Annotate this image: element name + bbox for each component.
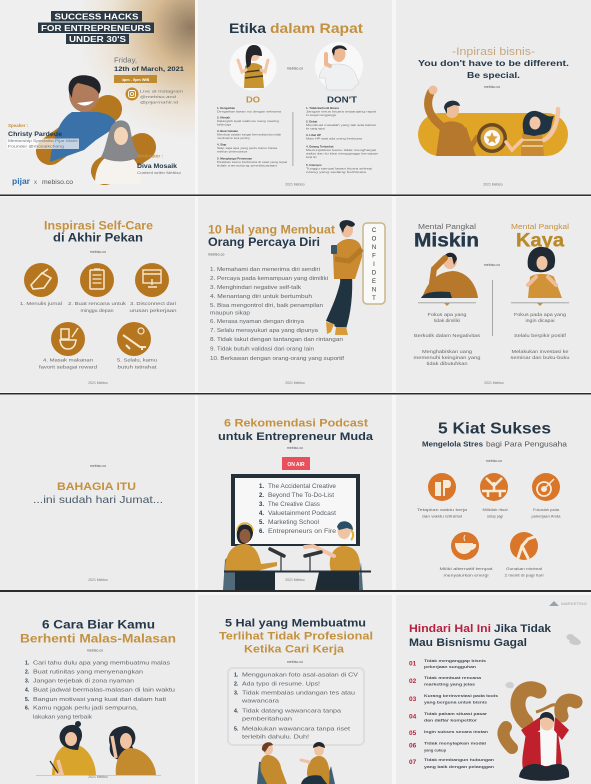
panel: success hacks webinar poster bbox=[0, 0, 195, 194]
list: ten points: 5. Bisa mengontrol diri, baik penampilan bbox=[210, 303, 323, 309]
labels: Milikilah ritual bbox=[482, 507, 508, 512]
heading: -Inpirasi bisnis- bbox=[452, 46, 535, 58]
moderator photo bbox=[95, 120, 142, 184]
list text bbox=[424, 659, 498, 769]
list: six tips: 2. bbox=[25, 670, 30, 676]
brand: mebiso: mebiso.co bbox=[208, 252, 224, 256]
list text: Tidak membuat rencana bbox=[424, 676, 482, 680]
screen with podcast list: The Creative Class bbox=[268, 502, 320, 508]
brand: mebiso: mebiso.co bbox=[287, 660, 303, 664]
labels: Fokuslah pada bbox=[533, 507, 560, 512]
card with list: terlebih dahulu. Duh! bbox=[242, 734, 309, 740]
list text: Tidak menyiapkan modal bbox=[424, 742, 486, 746]
icon: cooking bbox=[51, 322, 85, 356]
heading: kaya bbox=[511, 224, 570, 252]
decorative ghost: top right bbox=[566, 634, 581, 645]
panel: inspirasi self-care bbox=[0, 197, 195, 392]
icon: morning ritual bbox=[480, 473, 508, 501]
partner logos bbox=[12, 176, 73, 186]
logo: MARKETING bbox=[561, 602, 587, 606]
card with list: Ada typo di resume. Ups! bbox=[242, 682, 320, 688]
labels: pekerjaan Anda bbox=[532, 514, 561, 518]
footer: 2021 Mebiso bbox=[88, 578, 108, 582]
screen with podcast list bbox=[231, 474, 360, 546]
subtitle: Mengelola Stres bbox=[422, 442, 483, 448]
icon: instagram live: @mebiso.and bbox=[140, 95, 176, 99]
labels: setiap pagi bbox=[487, 514, 503, 518]
brand: mebiso: mebiso.co bbox=[484, 263, 500, 267]
title: 5 Kiat Sukses bbox=[438, 420, 551, 438]
numbers bbox=[409, 660, 417, 766]
icon: disconnect bbox=[135, 263, 169, 297]
screen with podcast list: 6. bbox=[259, 529, 264, 535]
icon: journal bbox=[24, 263, 58, 297]
brand: mebiso: mebiso.co bbox=[484, 85, 500, 89]
confident sign: I bbox=[373, 262, 375, 268]
speaker photo bbox=[50, 75, 116, 162]
list: six tips: Jangan terjebak di zona nyaman bbox=[33, 678, 134, 684]
card with list: 5. bbox=[234, 726, 239, 732]
title: 5 Hal yang Membuatmu bbox=[225, 618, 366, 630]
list: ten points: 3. Menghindari negative self-talk bbox=[210, 285, 302, 291]
title: success hacks: FOR ENTREPRENEURS bbox=[41, 24, 152, 33]
table line bbox=[36, 775, 161, 776]
quote: Be special. bbox=[467, 70, 520, 80]
speaker text bbox=[7, 123, 79, 149]
partner logos: x bbox=[34, 180, 37, 186]
list text: dan daftar kompetitor bbox=[424, 718, 478, 722]
list: dont: Tunggu sampai lawan bicara selesai bbox=[306, 166, 372, 170]
list: dont: 5. Interupsi bbox=[306, 163, 322, 167]
heading: dont: DON'T bbox=[327, 94, 358, 104]
list: six tips: 6. bbox=[25, 706, 30, 712]
numbers: 06 bbox=[409, 742, 417, 750]
rule lines bbox=[418, 302, 569, 306]
labels: 3. Disconnect dari bbox=[130, 301, 176, 307]
subtitle bbox=[422, 442, 567, 448]
card with list: wawancara bbox=[242, 698, 279, 704]
speaker text: Christy Pardede bbox=[8, 131, 62, 138]
speaker text: Mentorship Specialist Pijar Mahir bbox=[8, 139, 79, 143]
icon: work-life balance bbox=[428, 473, 456, 501]
list: do: sebelum pertemuannya bbox=[217, 150, 248, 154]
heading: miskin bbox=[414, 224, 479, 252]
title bbox=[218, 418, 374, 443]
card with list: 2. bbox=[234, 682, 239, 688]
confident sign bbox=[363, 223, 385, 304]
illustration: bored woman bbox=[109, 726, 156, 776]
panel: etika dalam rapat bbox=[198, 0, 392, 194]
panel: kiat sukses bbox=[396, 395, 591, 590]
card with list: Menggunakan foto asal-asalan di CV bbox=[242, 672, 359, 678]
headline: BAHAGIA ITU bbox=[57, 481, 136, 493]
illustration: podcast hosts bbox=[223, 521, 371, 590]
card with list bbox=[228, 668, 364, 745]
icon: planner bbox=[80, 263, 114, 297]
title bbox=[219, 618, 373, 656]
title: Terlihat Tidak Profesional bbox=[219, 630, 373, 642]
screen with podcast list: 5. bbox=[259, 520, 264, 526]
list: dont: orang yang sedang berbicara bbox=[306, 170, 367, 174]
list: dont bbox=[306, 106, 379, 174]
card with list: pemberitahuan bbox=[242, 716, 292, 722]
labels: urusan pekerjaan bbox=[130, 308, 177, 314]
panel: berhenti malas-malasan bbox=[0, 592, 195, 784]
list: six tips: 5. bbox=[25, 697, 30, 703]
list: six tips bbox=[25, 660, 175, 720]
event date and time: 4pm - 5pm WIB bbox=[122, 78, 149, 82]
subtitle: bagi Para Pengusaha bbox=[486, 442, 567, 448]
list: six tips: 3. bbox=[25, 678, 30, 684]
list: do: 1. Dengarkan bbox=[217, 106, 235, 110]
screen with podcast list: Marketing School bbox=[268, 520, 319, 526]
divider bbox=[491, 280, 494, 336]
screen with podcast list: The Accidental Creative bbox=[268, 484, 337, 490]
screen with podcast list: Beyond The To-Do-List bbox=[268, 493, 334, 499]
title: Ketika Cari Kerja bbox=[244, 644, 345, 656]
title: success hacks bbox=[38, 11, 154, 44]
points: kaya: Selalu berpikir positif bbox=[514, 333, 567, 338]
heading: kaya: Kaya bbox=[516, 230, 564, 252]
event date and time: Friday, bbox=[114, 56, 137, 64]
footer: 2021 Mebiso bbox=[483, 182, 503, 186]
brand: mebiso: mebiso.co bbox=[287, 66, 303, 70]
card with list: Melakukan wawancara tanpa riset bbox=[242, 726, 351, 732]
list: dont: Membuat masalah yang tak ada kaitan bbox=[306, 123, 377, 127]
screen with podcast list: 2. bbox=[259, 493, 264, 499]
list: do: Siap saja apa yang perlu kamu bawa bbox=[217, 146, 277, 150]
title: Jika Tidak bbox=[494, 623, 552, 635]
card with list: 4. bbox=[234, 708, 239, 714]
points: kaya: seminar dan buku-buku bbox=[510, 355, 570, 360]
title: 6 Cara Biar Kamu bbox=[42, 618, 155, 632]
points: miskin: memenuhi keinginan yang bbox=[414, 355, 481, 360]
title: Orang Percaya Diri bbox=[208, 237, 320, 249]
list: dont: Jangan terus bicara sepanjang rapat bbox=[306, 110, 376, 114]
list: ten points bbox=[210, 267, 345, 362]
confident sign: T bbox=[372, 296, 376, 302]
on air sign bbox=[282, 457, 310, 470]
list text: Tidak paham situasi pasar bbox=[424, 712, 488, 716]
panel: inspirasi bisnis bbox=[396, 0, 591, 194]
list: ten points: 2. Percaya pada kemampuan yang dimiliki bbox=[210, 276, 328, 282]
list: six tips: Kamu nggak perlu jadi sempurna, bbox=[33, 706, 138, 712]
list: ten points: 10. Berkawan dengan orang-orang yang suportif bbox=[210, 356, 345, 362]
illustration: writing woman bbox=[50, 721, 96, 776]
panel: 10 hal percaya diri bbox=[198, 197, 392, 392]
numbers: 01 bbox=[409, 660, 417, 668]
list: ten points: 9. Tidak butuh validasi dari orang lain bbox=[210, 346, 314, 352]
title: Berhenti Malas-Malasan bbox=[20, 632, 176, 646]
card with list: Tidak membalas undangan tes atau bbox=[242, 690, 355, 696]
list text: marketing yang jelas bbox=[424, 682, 475, 686]
title: success hacks: SUCCESS HACKS bbox=[54, 12, 139, 22]
heading: miskin: Mental Pangkal bbox=[418, 224, 477, 231]
illustration: job interview bbox=[257, 742, 335, 784]
screen with podcast list: 3. bbox=[259, 502, 264, 508]
illustration: celebrating people with medal bbox=[418, 86, 568, 156]
title bbox=[409, 623, 552, 649]
screen with podcast list: 4. bbox=[259, 511, 264, 517]
points: miskin: Berkutik dalam Negativitas bbox=[414, 333, 480, 338]
list: do: tidak memotong pembicaraan bbox=[217, 164, 278, 168]
points: miskin: tidak dimiliki bbox=[434, 318, 460, 323]
list: dont: Main HP saat ada orang berbicara bbox=[306, 136, 362, 140]
list: dont: 2. Debat bbox=[306, 120, 317, 124]
quote bbox=[418, 58, 569, 80]
title: di Akhir Pekan bbox=[53, 232, 143, 244]
list: six tips: 1. bbox=[25, 660, 30, 666]
heading: miskin: Miskin bbox=[414, 230, 479, 252]
list: dont: 1. Tidak Berhenti Bicara bbox=[306, 106, 339, 110]
list: do: 2. Hitmah bbox=[217, 116, 230, 120]
points: kaya: ingin dicapai bbox=[526, 318, 555, 323]
subline: ...ini sudah hari Jumat... bbox=[33, 494, 163, 506]
title bbox=[229, 20, 363, 36]
confident sign: C bbox=[372, 228, 377, 234]
title: Inspirasi Self-Care bbox=[44, 220, 153, 232]
card with list: 3. bbox=[234, 690, 239, 696]
list: ten points: 8. Tidak takut dengan tantangan dan rintangan bbox=[210, 337, 343, 343]
labels: 4. Masak makanan bbox=[43, 358, 93, 364]
list: dont: waktu dan itu bisa mengganggu kemajuan bbox=[306, 152, 379, 156]
list: dont: ini sangat mengganggu bbox=[306, 113, 336, 117]
icon: instagram live: @pijarmahir.id bbox=[140, 100, 178, 104]
speaker text: Speaker : bbox=[8, 123, 29, 128]
list: ten points: 7. Selalu mensyukuri apa yang dipunya bbox=[210, 328, 318, 334]
list: ten points: 1. Memahami dan menerima diri sendiri bbox=[210, 267, 320, 273]
labels: Miliki alternatif tempat bbox=[440, 566, 494, 571]
title: success hacks: UNDER 30'S bbox=[69, 35, 127, 44]
list text: Ingin sukses secara instan bbox=[424, 730, 489, 734]
brand: mebiso: mebiso.co bbox=[287, 446, 303, 450]
list: do: kalian juga bbox=[217, 122, 231, 126]
labels bbox=[20, 301, 177, 370]
icon: stretching bbox=[510, 532, 538, 560]
moderator text: Moderator : bbox=[138, 154, 164, 158]
footer: 2021 Mebiso bbox=[88, 381, 108, 385]
numbers: 04 bbox=[409, 714, 417, 720]
speaker text: Founder @mosaikchang bbox=[8, 144, 64, 148]
labels: Tetapkan waktu kerja bbox=[417, 507, 468, 512]
list: do: 4. Siap bbox=[217, 142, 227, 146]
labels: minggu depan bbox=[80, 308, 114, 314]
logo bbox=[549, 601, 587, 606]
list: six tips: Buat jadwal bermalas-malasan di lain waktu bbox=[33, 688, 175, 694]
illustration: woman do bbox=[230, 44, 276, 90]
card with list: 1. bbox=[234, 672, 239, 678]
labels: butuh istirahat bbox=[118, 364, 157, 370]
numbers: 07 bbox=[409, 759, 417, 766]
title: untuk Entrepreneur Muda bbox=[218, 431, 374, 443]
labels bbox=[417, 507, 561, 578]
labels: dan waktu istirahat bbox=[422, 514, 463, 518]
labels: favorit sebagai reward bbox=[39, 364, 97, 370]
list: six tips: Bangun motivasi yang kuat dari dalam hati bbox=[33, 697, 166, 703]
list: six tips: 4. bbox=[25, 688, 30, 694]
list text: yang berguna untuk bisnis bbox=[424, 700, 487, 704]
panel: mental miskin vs kaya bbox=[396, 197, 591, 392]
title: 10 Hal yang Membuat bbox=[208, 224, 335, 236]
illustration: confident man bbox=[326, 220, 362, 335]
card with list: Tidak datang wawancara tanpa bbox=[242, 708, 341, 714]
illustration: man dont bbox=[315, 42, 363, 90]
numbers: 03 bbox=[409, 696, 417, 703]
list: ten points: 6. Merasa nyaman dengan dirinya bbox=[210, 319, 304, 325]
confident sign: N bbox=[372, 288, 376, 294]
list: do: 3. Buat Catatan bbox=[217, 129, 238, 133]
list text: pekerjaan sungguhan bbox=[424, 665, 477, 669]
points: kaya: Melakukan investasi ke bbox=[512, 349, 569, 354]
labels: 2 menit di pagi hari bbox=[504, 572, 544, 578]
labels: Gunakan minimal bbox=[506, 566, 542, 571]
list: do: Dengarkan lawan mu dengan seksama bbox=[217, 110, 281, 114]
footer: 2021 Mebiso bbox=[484, 381, 504, 385]
partner logos: pijar bbox=[12, 176, 31, 186]
list: do bbox=[217, 106, 287, 168]
list: six tips: Cari tahu dulu apa yang membuatmu malas bbox=[33, 660, 171, 666]
confident sign: O bbox=[372, 236, 377, 242]
icon: instagram live bbox=[126, 88, 183, 104]
title: Etika bbox=[229, 20, 266, 36]
illustration: thinking woman bbox=[528, 247, 562, 298]
numbers: 02 bbox=[409, 678, 417, 685]
list text: Kurang berinvestasi pada tools bbox=[424, 694, 498, 698]
quote: You don't have to be different. bbox=[418, 58, 569, 68]
list: dont: kerja tim bbox=[306, 155, 318, 159]
icon: instagram live: Live at Instagram bbox=[140, 90, 183, 94]
list: do: 5. Menghargai Pertemuan bbox=[217, 156, 252, 160]
event date and time bbox=[114, 56, 184, 83]
points: miskin bbox=[414, 312, 481, 366]
title: 6 Rekomendasi Podcast bbox=[224, 418, 368, 430]
partner logos: mebiso.co bbox=[42, 179, 73, 186]
confident sign: E bbox=[372, 279, 376, 285]
brand: mebiso: mebiso.co bbox=[90, 464, 106, 468]
numbers: 05 bbox=[409, 730, 417, 737]
confident sign: N bbox=[372, 245, 376, 251]
panel: terlihat tidak profesional bbox=[198, 595, 392, 784]
labels: 5. Selalu, kamu bbox=[117, 358, 157, 364]
title: Mau Bisnismu Gagal bbox=[409, 637, 527, 649]
heading: do: DO bbox=[246, 94, 260, 104]
list: dont: 3. Lihat HP bbox=[306, 133, 321, 137]
list: do: Membuat catatan sangat bermanfaat dan tidak bbox=[217, 132, 282, 136]
footer: 2021 Mebiso bbox=[285, 578, 305, 582]
title bbox=[44, 220, 153, 244]
list: ten points: 4. Menantang diri untuk bertumbuh bbox=[210, 294, 312, 300]
title bbox=[208, 224, 335, 249]
list text: Tidak membangun hubungan bbox=[424, 758, 495, 762]
panel: hindari hal ini bbox=[396, 595, 591, 784]
points: miskin: Menghabiskan uang bbox=[422, 349, 473, 354]
points: miskin: Fokus apa yang bbox=[428, 312, 467, 317]
screen with podcast list: Valuetainment Podcast bbox=[268, 511, 336, 517]
panel: rekomendasi podcast bbox=[198, 395, 392, 590]
footer: 2021 Mebiso bbox=[88, 775, 108, 779]
brand: mebiso: mebiso.co bbox=[90, 250, 106, 254]
moderator text bbox=[137, 154, 181, 175]
footer: 2021 Mebiso bbox=[285, 381, 305, 385]
points: miskin: tidak dibutuhkan bbox=[426, 361, 468, 366]
labels: 1. Menulis jurnal bbox=[20, 301, 62, 307]
confident sign: D bbox=[372, 270, 377, 276]
confident sign: F bbox=[372, 254, 376, 260]
illustration: worried person with ghosts bbox=[504, 682, 576, 781]
screen with podcast list: 1. bbox=[259, 484, 264, 490]
list: ten points: maupun sikap bbox=[210, 310, 250, 316]
brand: mebiso: mebiso.co bbox=[486, 459, 502, 463]
moderator text: Content writer Mebiso bbox=[137, 171, 181, 175]
brand: mebiso: mebiso.co bbox=[87, 648, 103, 652]
icon: target focus bbox=[532, 473, 560, 501]
list: do: Datanglah tepat waktu ke ruang meeting bbox=[217, 119, 279, 123]
list text: yang baik dengan pelanggan bbox=[424, 765, 495, 769]
heading: kaya: Mental Pangkal bbox=[511, 224, 570, 231]
on air sign: ON AIR bbox=[287, 462, 305, 468]
list: six tips: lakukan yang terbaik bbox=[33, 714, 93, 720]
list: dont: ke ruang rapat bbox=[306, 126, 325, 130]
list: dont: Menunjukkan kamu tidak menghargai bbox=[306, 148, 377, 152]
list: six tips: Buat rutinitas yang menyenangkan bbox=[33, 670, 143, 676]
divider bbox=[292, 112, 294, 166]
footer: 2021 Mebiso bbox=[285, 182, 305, 186]
list text: Tidak menganggap bisnis bbox=[424, 659, 486, 663]
icon: rest bbox=[117, 322, 151, 356]
title: Hindari Hal Ini bbox=[409, 623, 491, 635]
illustration: worried man bbox=[421, 253, 478, 298]
list: dont: 4. Datang Terlambat bbox=[306, 144, 333, 148]
title bbox=[20, 618, 176, 646]
list: do: membuatmu lupa penting bbox=[217, 136, 250, 140]
labels: menyalurkan energi bbox=[444, 572, 489, 578]
event date and time: 12th of March, 2021 bbox=[114, 66, 184, 73]
points: kaya: Fokus pada apa yang bbox=[514, 312, 567, 317]
screen with podcast list: Entrepreneurs on Fire bbox=[268, 529, 337, 535]
title: dalam Rapat bbox=[270, 20, 363, 36]
moderator text: Diva Mosaik bbox=[137, 164, 178, 170]
labels: 2. Buat rencana untuk bbox=[68, 301, 127, 307]
icon: coffee cup bbox=[451, 532, 479, 560]
list text: yang cukup bbox=[424, 748, 447, 752]
list: do: Pastikan kamu berbicara di saat yang tepat bbox=[217, 160, 287, 164]
panel: bahagia itu bbox=[0, 395, 195, 590]
points: kaya bbox=[510, 312, 570, 360]
